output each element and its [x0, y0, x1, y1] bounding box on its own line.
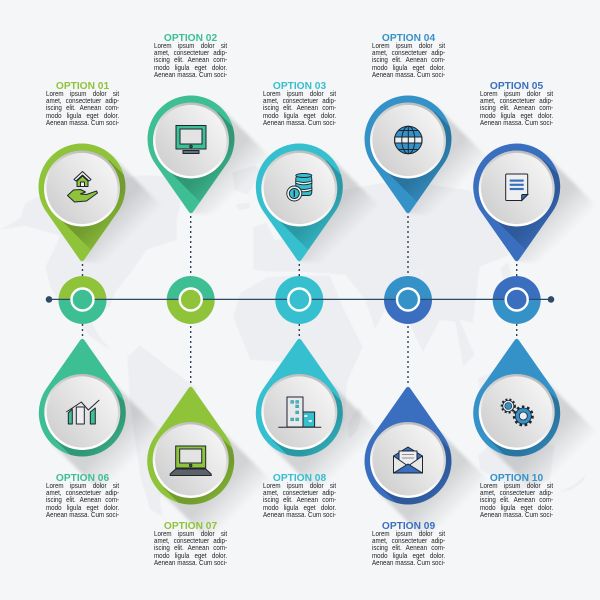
option 06 text: modo ligula eget dolor. — [46, 504, 119, 512]
pin 10 — [473, 338, 590, 486]
option 08 text: amet, consectetuer adip- — [263, 489, 336, 497]
icon: house in hand — [68, 172, 98, 202]
option 04 text: amet, consectetuer adip- — [372, 49, 445, 57]
option 06 text: iscing elit. Aenean com- — [46, 496, 119, 504]
pin 4 — [364, 96, 481, 214]
option 01 text: iscing elit. Aenean com- — [46, 104, 119, 112]
option 07 text: amet, consectetuer adip- — [154, 537, 227, 545]
option 01 text: amet, consectetuer adip- — [46, 97, 119, 105]
option 08 text: Lorem ipsum dolor sit — [263, 482, 336, 490]
option 09 text: modo ligula eget dolor. — [372, 552, 445, 560]
pin 7 — [147, 386, 264, 534]
option 05 text: amet, consectetuer adip- — [480, 97, 553, 105]
option 01 text: OPTION 01 — [56, 80, 109, 92]
option 03 text: Lorem ipsum dolor sit — [263, 90, 336, 98]
pin 6 — [38, 338, 156, 486]
option 07 text: Aenean massa. Cum soci- — [154, 559, 227, 567]
option 04 text — [372, 32, 446, 79]
option 03 text: Aenean massa. Cum soci- — [263, 119, 336, 127]
option 03 text: amet, consectetuer adip- — [263, 97, 336, 105]
option 08 text — [263, 472, 336, 519]
timeline circle 1 — [58, 276, 106, 324]
option 07 text — [154, 520, 228, 567]
option 04 text: Lorem ipsum dolor sit — [372, 42, 445, 50]
timeline circle 2 — [167, 276, 215, 324]
option 03 text: modo ligula eget dolor. — [263, 112, 336, 120]
icon: gears — [502, 399, 532, 425]
timeline circle 4 — [384, 276, 432, 324]
icon: growth chart — [66, 400, 99, 424]
timeline circle 3 — [275, 276, 323, 324]
option 09 text: Lorem ipsum dolor sit — [372, 530, 445, 538]
option 02 text: OPTION 02 — [164, 32, 217, 44]
option 09 text: Aenean massa. Cum soci- — [372, 559, 445, 567]
icon: database and coin — [287, 174, 312, 201]
option 10 text: modo ligula eget dolor. — [480, 504, 553, 512]
icon: globe — [394, 126, 422, 154]
pin 9 — [364, 386, 481, 534]
icon: monitor — [176, 126, 206, 154]
option 08 text: iscing elit. Aenean com- — [263, 496, 336, 504]
option 10 text: Aenean massa. Cum soci- — [480, 511, 553, 519]
option 09 text: amet, consectetuer adip- — [372, 537, 445, 545]
option 07 text: modo ligula eget dolor. — [154, 552, 227, 560]
option 10 text: amet, consectetuer adip- — [480, 489, 553, 497]
timeline ring 5 — [506, 288, 528, 310]
option 02 text: iscing elit. Aenean com- — [154, 56, 227, 64]
option 09 text: OPTION 09 — [382, 520, 435, 532]
option 07 text: Lorem ipsum dolor sit — [154, 530, 227, 538]
option 01 text: Aenean massa. Cum soci- — [46, 119, 119, 127]
pin 5 — [473, 144, 590, 262]
pin 2 — [148, 96, 264, 214]
pin 8 — [256, 338, 372, 486]
option 06 text — [46, 472, 120, 519]
option 02 text: amet, consectetuer adip- — [154, 49, 227, 57]
option 02 text: Lorem ipsum dolor sit — [154, 42, 227, 50]
icon: laptop — [170, 446, 211, 476]
option 08 text: Aenean massa. Cum soci- — [263, 511, 336, 519]
icon: open envelope — [394, 447, 422, 473]
option 06 text: amet, consectetuer adip- — [46, 489, 119, 497]
option 04 text: Aenean massa. Cum soci- — [372, 71, 445, 79]
option 06 text: OPTION 06 — [56, 472, 109, 484]
timeline ring 2 — [180, 288, 202, 310]
option 08 text: modo ligula eget dolor. — [263, 504, 336, 512]
option 01 text: Lorem ipsum dolor sit — [46, 90, 119, 98]
world map background — [0, 165, 587, 517]
timeline ring 3 — [288, 288, 310, 310]
timeline ring 4 — [397, 288, 419, 310]
option 05 text: Aenean massa. Cum soci- — [480, 119, 553, 127]
option 05 text: OPTION 05 — [490, 80, 543, 92]
option 02 text: modo ligula eget dolor. — [154, 64, 227, 72]
option 02 text — [154, 32, 228, 79]
option 03 text: iscing elit. Aenean com- — [263, 104, 336, 112]
option 10 text: iscing elit. Aenean com- — [480, 496, 553, 504]
option 09 text: iscing elit. Aenean com- — [372, 544, 445, 552]
option 08 text: OPTION 08 — [273, 472, 326, 484]
option 01 text — [46, 80, 120, 127]
icon: buildings — [278, 397, 321, 427]
option 03 text: OPTION 03 — [273, 80, 326, 92]
option 01 text: modo ligula eget dolor. — [46, 112, 119, 120]
option 04 text: iscing elit. Aenean com- — [372, 56, 445, 64]
dashed connectors — [82, 216, 517, 384]
timeline circle 5 — [493, 276, 541, 324]
pin 3 — [256, 144, 372, 262]
option 09 text — [372, 520, 446, 567]
infographic graphics — [38, 96, 590, 534]
option 06 text: Aenean massa. Cum soci- — [46, 511, 119, 519]
option 05 text — [480, 80, 554, 127]
option 10 text — [480, 472, 554, 519]
pin 1 — [38, 144, 155, 262]
option 03 text — [263, 80, 336, 127]
option 04 text: OPTION 04 — [382, 32, 435, 44]
timeline axis — [46, 296, 554, 303]
option 05 text: Lorem ipsum dolor sit — [480, 90, 553, 98]
option 06 text: Lorem ipsum dolor sit — [46, 482, 119, 490]
option 04 text: modo ligula eget dolor. — [372, 64, 445, 72]
option 07 text: iscing elit. Aenean com- — [154, 544, 227, 552]
option 05 text: iscing elit. Aenean com- — [480, 104, 553, 112]
timeline ring 1 — [72, 288, 94, 310]
option 10 text: Lorem ipsum dolor sit — [480, 482, 553, 490]
option 02 text: Aenean massa. Cum soci- — [154, 71, 227, 79]
icon: document — [506, 174, 528, 200]
option 07 text: OPTION 07 — [164, 520, 217, 532]
option 10 text: OPTION 10 — [490, 472, 543, 484]
option 05 text: modo ligula eget dolor. — [480, 112, 553, 120]
